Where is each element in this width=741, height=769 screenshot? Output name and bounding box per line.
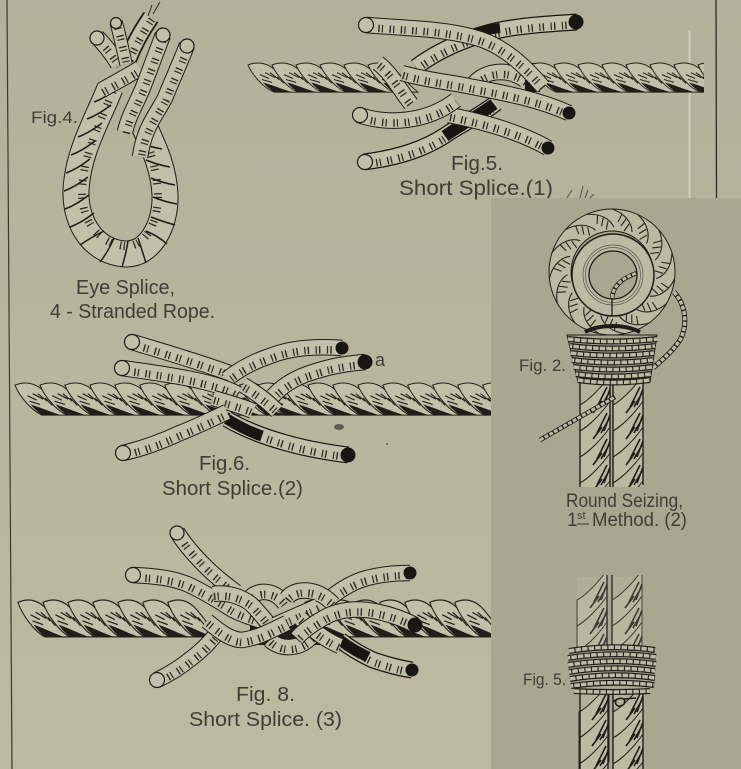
rope eye loop (64, 88, 177, 267)
Fig. 8: short splice step 3 (18, 526, 507, 731)
caption: Fig.6 short splice (2): Fig.6. (199, 453, 250, 475)
thimble (572, 234, 654, 316)
thin cord, lower end (540, 397, 615, 440)
straight rope with strands (18, 600, 507, 637)
caption: round seizing 1st method (2) (566, 491, 687, 531)
Fig. 6: short splice step 2 (15, 334, 535, 500)
straight rope with strands (15, 383, 535, 415)
caption: eye splice: 4 - Stranded Rope. (50, 301, 215, 323)
Fig. 5: seizing on doubled rope (523, 560, 656, 769)
caption: Fig.6 short splice (2): Short Splice.(2) (162, 478, 303, 500)
Fig. 2: round seizing, 1st method (519, 206, 687, 531)
seizing turns (567, 326, 657, 382)
caption: eye splice: Eye Splice, (76, 277, 175, 299)
label: Fig.4: Fig.4. (31, 108, 78, 127)
caption: Fig.8 short splice (3): Short Splice. (3) (189, 709, 342, 731)
caption: round seizing 1st method (2): Round Seizing, (566, 491, 683, 512)
caption: Fig.8 short splice (3): Fig. 8. (236, 684, 295, 706)
upper rope legs (570, 560, 650, 678)
loose strand ends at top of eye (90, 2, 194, 160)
caption: round seizing 1st method (2): st (577, 510, 586, 522)
specks (334, 424, 388, 445)
rope ring around thimble (547, 206, 678, 338)
seizing turns (568, 646, 656, 706)
caption: Fig.5 short splice (1): Short Splice.(1) (399, 177, 553, 200)
label: Fig.5: Fig. 5. (523, 670, 566, 689)
label: Fig.2: Fig. 2. (519, 356, 566, 375)
caption: round seizing 1st method (2): 1 (567, 510, 578, 531)
caption: Fig.5 short splice (1): Fig.5. (451, 153, 503, 175)
label: a: a (375, 350, 386, 370)
lower rope legs (579, 682, 643, 769)
straight rope with strands (248, 63, 741, 92)
caption: Fig.5 short splice (1) (399, 153, 553, 200)
loose strands crossing (352, 15, 583, 170)
caption: Fig.6 short splice (2) (162, 453, 303, 500)
thin cord, upper end (653, 292, 685, 368)
Fig. 4: eye splice in 4-stranded rope (31, 2, 215, 323)
caption: round seizing 1st method (2): Method. (2) (592, 510, 687, 531)
caption: eye splice (50, 277, 215, 323)
stray mark (567, 186, 594, 198)
caption: Fig.8 short splice (3) (189, 684, 342, 731)
interlaced strands and knot (126, 526, 422, 688)
loose strands crossing (114, 334, 372, 462)
two rope legs below seizing (575, 375, 650, 517)
Fig. 5: short splice step 1 (248, 15, 741, 200)
panel: overlaid darker page with seizing figures (491, 198, 741, 769)
